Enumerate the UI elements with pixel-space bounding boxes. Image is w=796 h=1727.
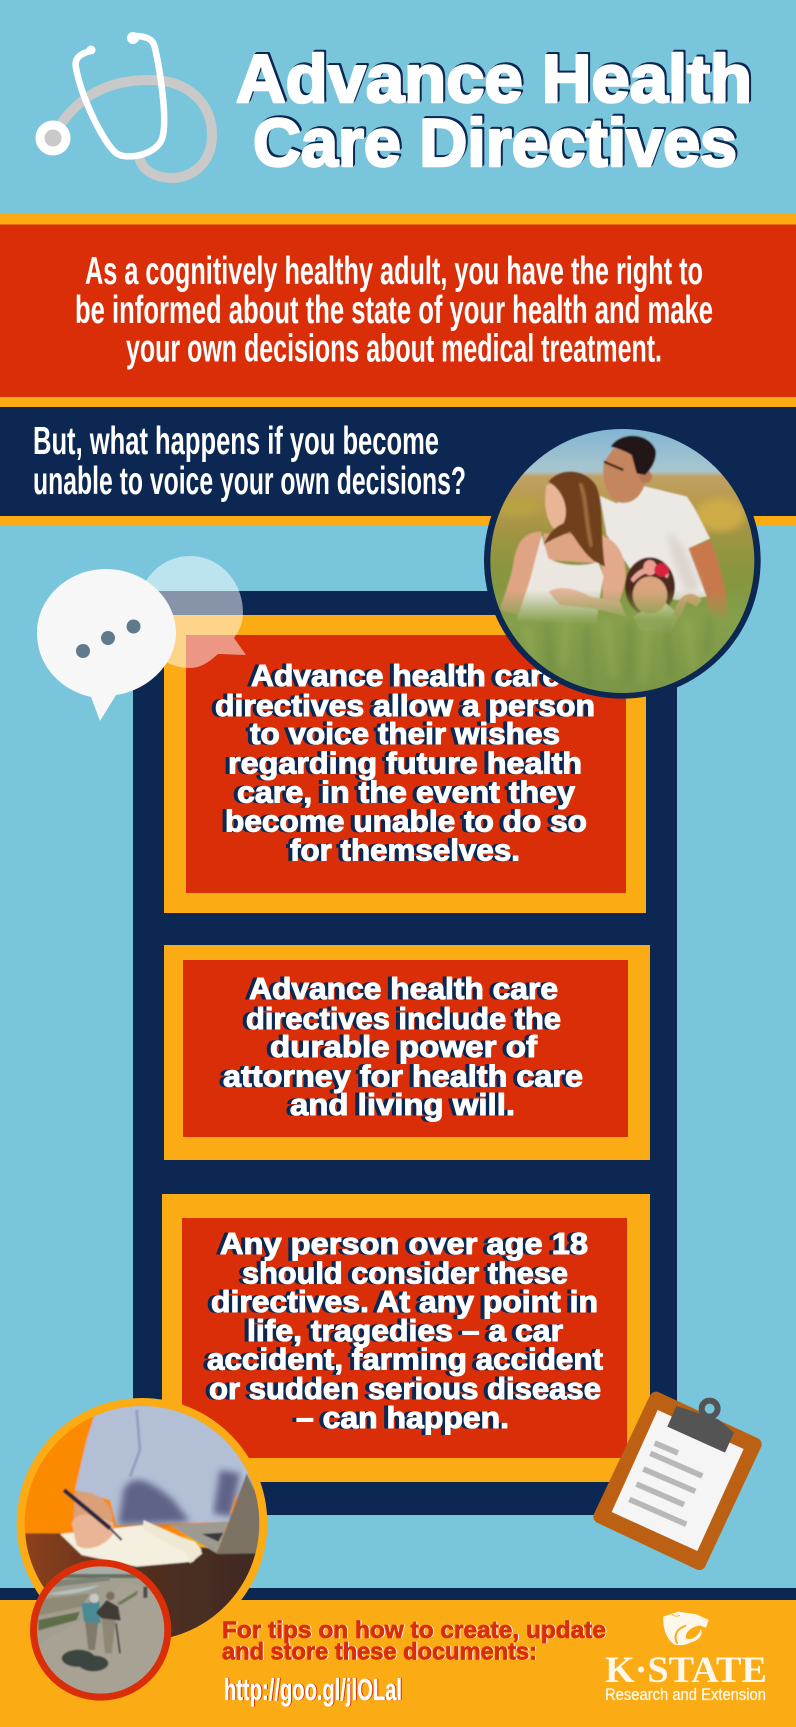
footer band bbox=[0, 1588, 796, 1727]
panel: what directives include box: durable power of bbox=[270, 1029, 538, 1064]
woman's arms bbox=[500, 532, 542, 617]
title: Care Directives bbox=[253, 105, 737, 181]
panel: what directives include box: and living will. bbox=[290, 1087, 515, 1122]
woman's top bbox=[517, 535, 603, 623]
panel: who should consider box: or sudden serious disease bbox=[209, 1371, 601, 1406]
call to action text: and store these documents: bbox=[222, 1638, 537, 1666]
panel: who should consider box: life, tragedies – a car bbox=[247, 1313, 563, 1348]
grass bbox=[500, 592, 729, 634]
panel: what directives include box: attorney for health care bbox=[223, 1058, 583, 1094]
icon: speech bubbles bbox=[37, 556, 246, 721]
K-State logo bbox=[605, 1612, 767, 1704]
panel: what directives include box: directives include the bbox=[246, 1001, 561, 1036]
photo: person writing at a desk bbox=[17, 1398, 267, 1649]
panel: definition box: directives allow a person bbox=[215, 688, 595, 723]
panel: definition box: become unable to do so bbox=[225, 804, 587, 838]
woman's hair bbox=[543, 472, 605, 567]
panel: who should consider box: accident, farming accident bbox=[207, 1342, 603, 1376]
panel: who should consider box: Any person over age 18 bbox=[220, 1226, 588, 1261]
panel: question navy band bbox=[0, 407, 796, 526]
title: Advance Health bbox=[236, 41, 752, 117]
photo: elderly couple walking bbox=[30, 1559, 171, 1701]
link: http://goo.gl/jlOLal bbox=[224, 1672, 402, 1707]
panel: who should consider box: should consider these bbox=[242, 1256, 568, 1290]
panel: question navy band: But, what happens if you become bbox=[33, 420, 439, 463]
man's shirt bbox=[600, 486, 710, 600]
icon: stethoscope bbox=[40, 32, 212, 178]
K-State logo: K·STATE bbox=[605, 1650, 767, 1691]
panel: definition box: for themselves. bbox=[290, 832, 520, 868]
panel: definition box: Advance health care bbox=[251, 658, 560, 693]
panel: who should consider box bbox=[162, 1194, 650, 1482]
man's head bbox=[603, 448, 648, 503]
panel: navy column bbox=[133, 591, 677, 1515]
call to action text bbox=[222, 1617, 606, 1666]
title bbox=[236, 41, 752, 181]
panel: intro red band bbox=[0, 214, 796, 407]
panel: definition box: regarding future health bbox=[228, 746, 582, 780]
photo: family in a field bbox=[480, 422, 770, 699]
panel: what directives include box bbox=[164, 945, 650, 1160]
man's arm bbox=[688, 540, 728, 617]
girl bbox=[625, 557, 675, 616]
panel: who should consider box: – can happen. bbox=[296, 1400, 509, 1435]
panel: question navy band: unable to voice your own decisions? bbox=[33, 460, 466, 503]
call to action text: For tips on how to create, update bbox=[222, 1617, 606, 1644]
panel: what directives include box: Advance health care bbox=[249, 971, 558, 1006]
panel: who should consider box: directives. At any point in bbox=[211, 1284, 598, 1319]
panel: definition box: care, in the event they bbox=[237, 774, 576, 810]
icon: wildcat bbox=[663, 1612, 709, 1645]
woman's face bbox=[544, 483, 568, 530]
panel: definition box bbox=[164, 615, 646, 913]
hand bbox=[548, 588, 627, 617]
panel: definition box: to voice their wishes bbox=[250, 716, 560, 751]
icon: clipboard bbox=[600, 1398, 755, 1563]
K-State logo: Research and Extension bbox=[605, 1685, 766, 1704]
